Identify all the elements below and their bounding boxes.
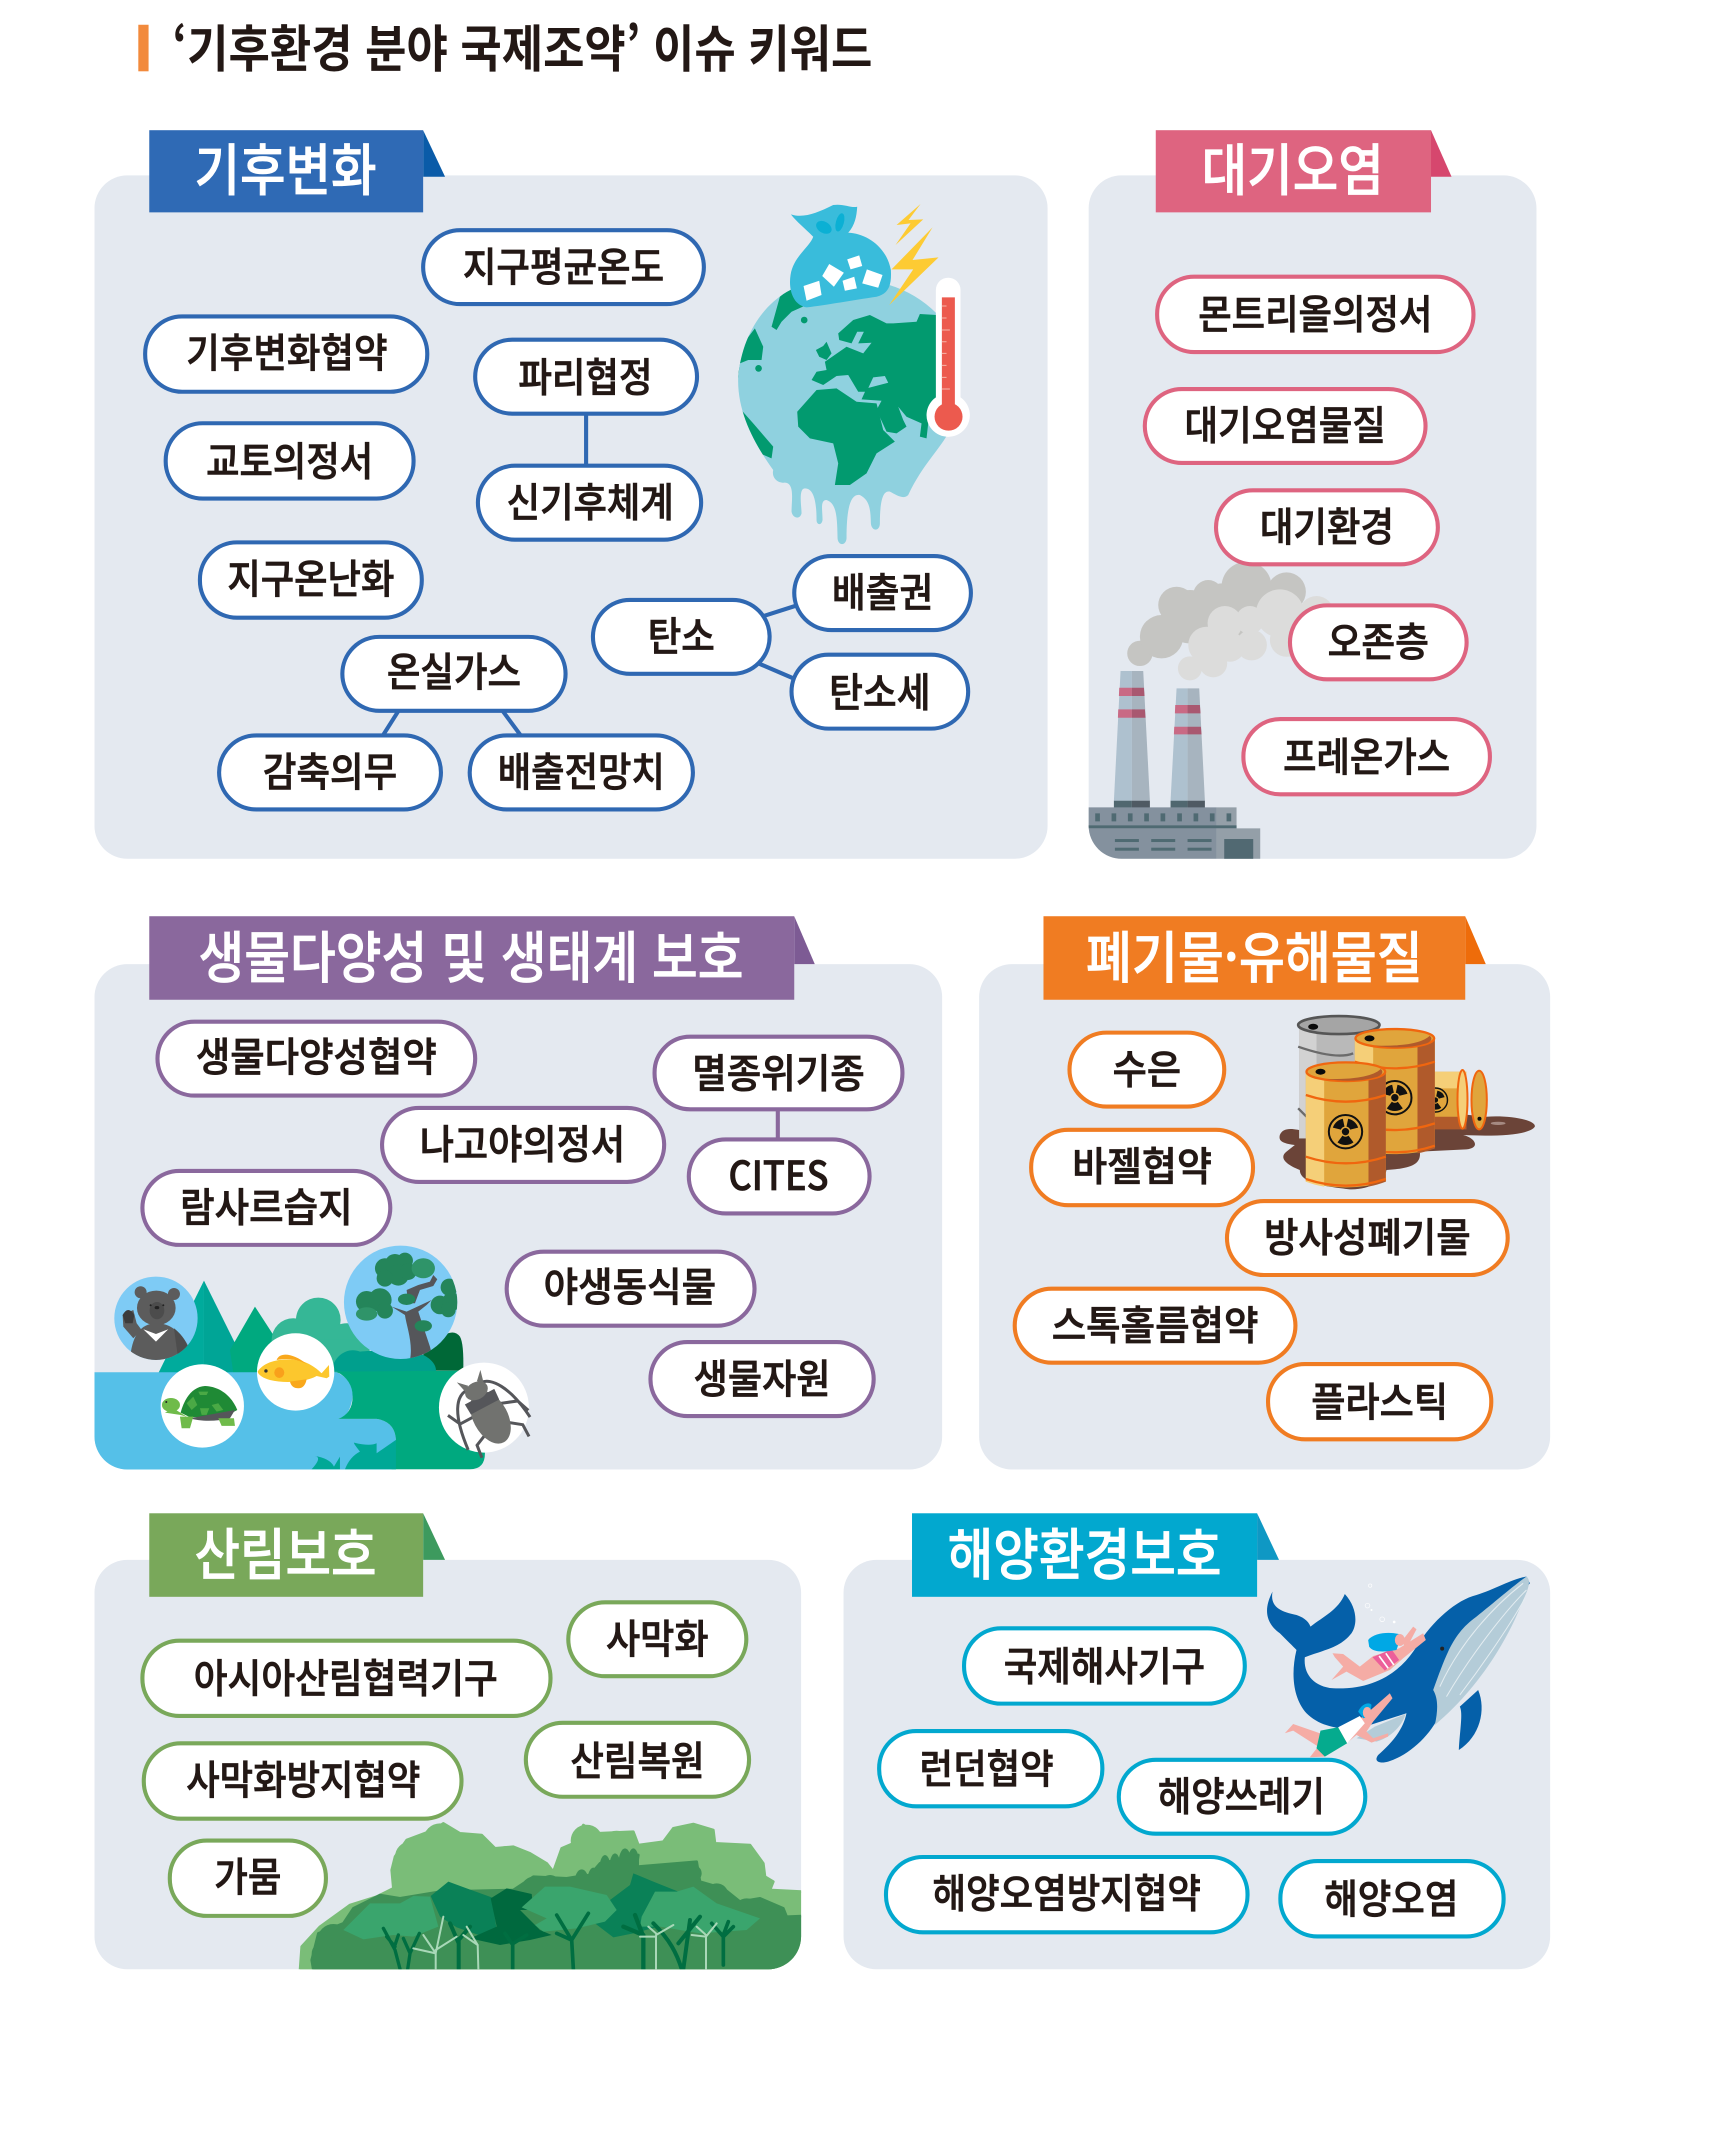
keyword: CITES: [689, 1139, 870, 1213]
keyword: 산림복원: [526, 1723, 749, 1797]
keyword: 파리협정: 파리협정: [518, 347, 653, 404]
heading: climate change: [149, 126, 445, 212]
keyword: 수은: 수은: [1113, 1038, 1181, 1095]
keyword: 아시아산림협력기구: [142, 1641, 550, 1716]
keyword: 스톡홀름협약: 스톡홀름협약: [1052, 1294, 1258, 1351]
keyword: 멸종위기종: 멸종위기종: [692, 1042, 865, 1099]
illustration: factory with smoke: [1083, 562, 1334, 862]
keyword: 나고야의정서: 나고야의정서: [420, 1114, 625, 1171]
keyword: 스톡홀름협약: [1015, 1289, 1295, 1363]
illustration: leaking barrels: [1280, 1016, 1535, 1189]
keyword: 사막화방지협약: 사막화방지협약: [186, 1749, 420, 1806]
keyword: 오존층: [1290, 605, 1467, 679]
keyword: 배출전망치: [470, 735, 693, 809]
keyword: 감축의무: 감축의무: [263, 741, 397, 798]
keyword: 감축의무: [219, 735, 441, 809]
keyword: 산림복원: 산림복원: [570, 1730, 705, 1787]
keyword: 파리협정: [475, 340, 697, 414]
heading: biodiversity: 생물다양성 및 생태계 보호: [199, 914, 744, 995]
illustration: whale and swimmers: [1267, 1577, 1530, 1763]
heading: air pollution: [1156, 126, 1452, 212]
keyword: 대기환경: [1216, 490, 1438, 564]
keyword: 몬트리올의정서: 몬트리올의정서: [1198, 284, 1432, 341]
keyword: 몬트리올의정서: [1157, 277, 1473, 352]
keyword: 바젤협약: 바젤협약: [1072, 1136, 1212, 1193]
keyword: 방사성폐기물: 방사성폐기물: [1264, 1207, 1471, 1264]
panel: marine environment: [844, 1511, 1550, 1969]
heading: marine environment: 해양환경보호: [948, 1511, 1221, 1592]
keyword: 지구온난화: [200, 542, 422, 618]
heading: forest protection: 산림보호: [194, 1511, 377, 1592]
keyword: 람사르습지: 람사르습지: [180, 1177, 353, 1234]
keyword: 오존층: 오존층: [1328, 611, 1429, 668]
keyword: 교토의정서: [166, 423, 414, 499]
panel: biodiversity: [90, 914, 942, 1473]
connector: 멸종위기종 to CITES: [776, 1109, 779, 1139]
connectors: keyword links: [382, 414, 797, 737]
keyword: 생물다양성협약: [157, 1022, 475, 1096]
keyword: 가뭄: [170, 1841, 326, 1916]
keyword: 기후변화협약: [145, 316, 427, 392]
keyword: 배출권: 배출권: [832, 562, 933, 619]
keyword: 기후변화협약: 기후변화협약: [186, 322, 388, 379]
keyword: 해양쓰레기: 해양쓰레기: [1158, 1765, 1325, 1822]
keyword: 생물다양성협약: 생물다양성협약: [196, 1026, 437, 1083]
illustration: wildlife and wetland: [90, 1246, 539, 1473]
keyword: 사막화방지협약: [144, 1743, 461, 1819]
keyword: 탄소세: [792, 655, 968, 729]
keyword: 해양쓰레기: [1119, 1760, 1365, 1834]
keyword: 지구평균온도: 지구평균온도: [463, 236, 664, 293]
keyword: 생물자원: 생물자원: [694, 1348, 831, 1405]
keyword: 교토의정서: 교토의정서: [206, 430, 373, 487]
keyword: CITES: CITES: [729, 1145, 828, 1202]
keyword: 플라스틱: 플라스틱: [1311, 1371, 1448, 1428]
keyword: 탄소: [593, 600, 770, 674]
keyword: 신기후체계: 신기후체계: [507, 471, 674, 528]
keyword: 아시아산림협력기구: 아시아산림협력기구: [194, 1648, 498, 1705]
keyword: 생물자원: [650, 1342, 874, 1416]
title: ‘기후환경 분야 국제조약’ 이슈 키워드: [173, 8, 872, 82]
heading: climate change: 기후변화: [194, 126, 377, 207]
keyword: 온실가스: [342, 637, 566, 711]
heading: forest protection: [149, 1511, 445, 1597]
keyword: 신기후체계: [478, 466, 701, 540]
keyword: 배출전망치: 배출전망치: [498, 741, 665, 798]
keyword: 사막화: 사막화: [606, 1608, 709, 1665]
heading: air pollution: 대기오염: [1202, 126, 1384, 207]
keyword: 가뭄: 가뭄: [214, 1846, 281, 1903]
keyword: 바젤협약: [1031, 1130, 1253, 1205]
keyword: 국제해사기구: 국제해사기구: [1004, 1635, 1205, 1692]
keyword: 국제해사기구: [964, 1628, 1245, 1704]
keyword: 멸종위기종: [655, 1037, 902, 1109]
keyword: 플라스틱: [1268, 1364, 1491, 1439]
keyword: 해양오염: [1280, 1861, 1504, 1936]
keyword: 해양오염: 해양오염: [1324, 1868, 1458, 1925]
panel: forest protection: [94, 1511, 803, 1970]
keyword: 방사성폐기물: [1227, 1201, 1508, 1275]
keyword: 야생동식물: [507, 1252, 755, 1326]
illustration: forest: [300, 1823, 803, 1970]
keyword: 해양오염방지협약: 해양오염방지협약: [933, 1863, 1201, 1920]
keyword: 프레온가스: [1243, 719, 1490, 794]
keyword: 람사르습지: [142, 1171, 390, 1245]
keyword: 런던협약: 런던협약: [920, 1738, 1054, 1795]
keyword: 대기오염물질: [1145, 389, 1426, 463]
keyword: 탄소세: 탄소세: [829, 662, 931, 719]
keyword: 대기오염물질: 대기오염물질: [1185, 395, 1386, 452]
keyword: 대기환경: 대기환경: [1260, 496, 1394, 553]
keyword: 수은: [1069, 1033, 1224, 1107]
heading: waste: 폐기물·유해물질: [1086, 914, 1423, 995]
keyword: 해양오염방지협약: [886, 1857, 1248, 1932]
keyword: 프레온가스: 프레온가스: [1283, 726, 1450, 783]
keyword: 탄소: 탄소: [648, 606, 715, 663]
keyword: 야생동식물: 야생동식물: [544, 1256, 716, 1313]
illustration: melting earth: [733, 204, 970, 544]
keyword: 지구온난화: 지구온난화: [227, 548, 394, 605]
panel: waste and hazardous substances: [979, 914, 1550, 1469]
keyword: 온실가스: 온실가스: [387, 641, 521, 698]
keyword: 런던협약: [879, 1731, 1102, 1806]
keyword: 배출권: [794, 556, 971, 630]
keyword: 사막화: [568, 1602, 746, 1676]
panel: air pollution: [1083, 126, 1536, 862]
keyword: 나고야의정서: [382, 1108, 664, 1182]
panel: climate change: [94, 126, 1048, 859]
keyword: 지구평균온도: [423, 230, 704, 304]
